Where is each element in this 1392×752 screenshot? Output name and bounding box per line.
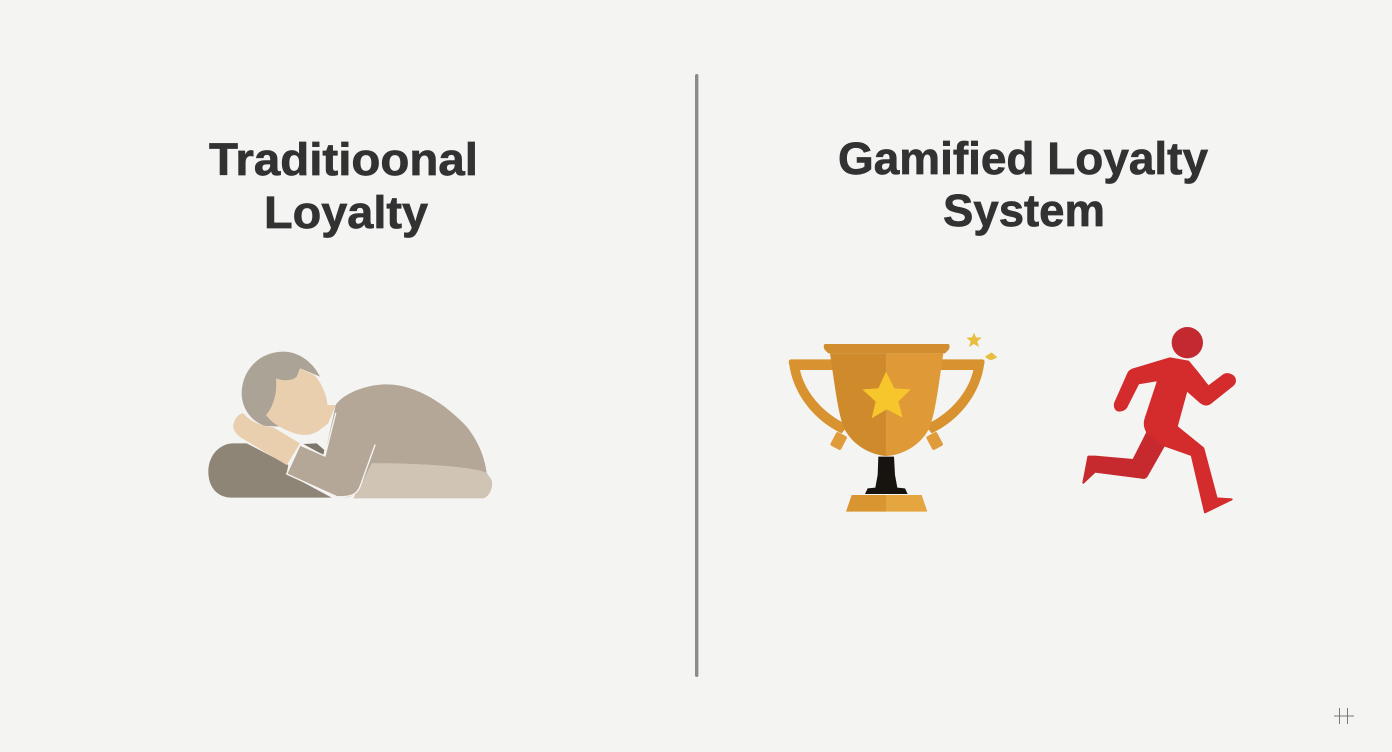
heading: Traditional Loyalty [209,134,478,238]
pillow [208,443,332,498]
heading: Gamified Loyalty System [838,133,1208,236]
stem [865,457,908,494]
base [846,495,887,512]
sparkle [985,352,997,360]
center divider [695,74,698,677]
face [266,368,336,435]
hair [242,352,320,427]
back [325,384,487,490]
right handle [925,359,985,433]
icon: corner mark [1334,708,1354,724]
heading: Gamified Loyalty System: System [943,185,1105,236]
rim [824,344,950,353]
sleeve outline [287,413,375,497]
icon: trophy [789,333,997,512]
collar shadow [303,443,324,455]
left handle [789,359,848,433]
heading: Traditional Loyalty: Traditioonal [209,134,478,185]
sleeve [287,440,375,497]
torso, arms and front leg [1115,358,1235,512]
head [1172,327,1203,358]
resting arm and hand [233,413,300,465]
handle tabs [830,431,848,451]
heading: Traditional Loyalty: Loyalty [264,187,428,238]
back leg [1083,432,1164,483]
icon: running person [1083,327,1235,512]
cup [830,353,887,456]
star [862,372,911,418]
icon: sleeping person [208,352,492,498]
lower body [353,463,492,498]
heading: Gamified Loyalty System: Gamified Loyalty [838,133,1208,184]
sparkle star [966,333,982,347]
